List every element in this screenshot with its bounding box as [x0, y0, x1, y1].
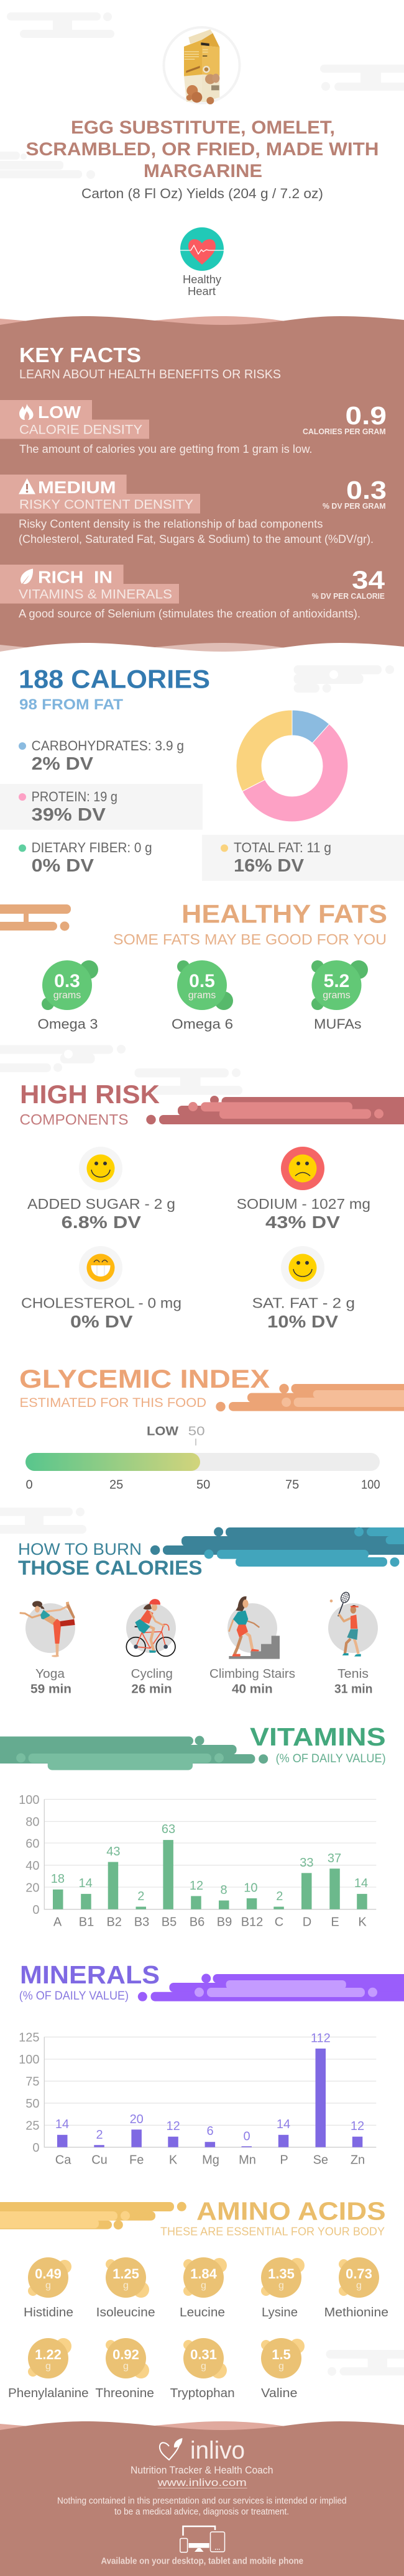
risk: cholesterol: 0% DV	[70, 1312, 133, 1331]
amino acid: leucine	[180, 2257, 227, 2319]
icon: healthy heart badge	[180, 227, 224, 298]
fat: omega 3: 0.3	[54, 971, 80, 991]
macro: carbohydrates	[19, 738, 184, 774]
heading: key facts: KEY FACTS	[19, 344, 141, 366]
fact: medium risky content density	[0, 475, 387, 545]
fat: omega 6: 0.5	[189, 971, 215, 991]
icon: healthy heart badge: Healthy	[183, 273, 221, 286]
amino acid: isoleucine	[96, 2257, 155, 2319]
fat: mufas: 5.2	[324, 971, 349, 991]
bar chart: vitamins: B2	[106, 1915, 122, 1929]
gauge: glycemic index: 25	[109, 1478, 123, 1492]
risk: sodium	[237, 1147, 370, 1232]
bar chart: vitamins: 18	[51, 1872, 65, 1886]
bar chart: minerals: Ca	[55, 2153, 71, 2167]
heading: glycemic index: ESTIMATED FOR THIS FOOD	[20, 1395, 206, 1410]
macro: total fat: TOTAL FAT: 11 g	[234, 840, 331, 855]
heading: healthy fats	[0, 899, 387, 949]
bar chart: vitamins: 10	[244, 1881, 258, 1895]
amino acid: threonine: g	[123, 2361, 129, 2372]
fact: low calorie density: CALORIES PER GRAM	[303, 427, 386, 436]
bar chart: minerals: 20	[130, 2113, 144, 2126]
bar chart: vitamins: 60	[25, 1837, 40, 1851]
bar chart: minerals: Mn	[239, 2153, 256, 2167]
exercise labels and durations: Yoga	[35, 1667, 65, 1681]
heading: amino acids: THESE ARE ESSENTIAL FOR YOUR BODY	[160, 2225, 385, 2238]
bar chart: minerals: 12	[351, 2119, 364, 2133]
bar chart: minerals: 0	[32, 2141, 40, 2155]
bar chart: minerals: 2	[96, 2128, 103, 2142]
title	[26, 117, 379, 181]
heading: key facts	[19, 344, 281, 381]
icon: desktop, tablet and phone	[180, 2526, 225, 2552]
bar chart: vitamins: 2	[137, 1890, 144, 1903]
bar chart: vitamins: K	[358, 1915, 367, 1929]
gauge: glycemic index: LOW	[147, 1425, 178, 1439]
fact: medium risky content density: (Cholesterol, Saturated Fat, Sugars & Sodium) to the amount (%DV/gr).	[19, 533, 374, 545]
macro: carbohydrates: CARBOHYDRATES: 3.9 g	[32, 738, 184, 753]
bar chart: vitamins: B12	[241, 1915, 263, 1929]
bar chart: vitamins: 2	[276, 1890, 283, 1903]
amino acid: histidine	[24, 2257, 73, 2319]
bar chart: vitamins: A	[53, 1915, 62, 1929]
amino acid: lysine: Lysine	[262, 2306, 298, 2319]
macro: dietary fiber: 0% DV	[32, 856, 94, 876]
fact: low calorie density	[0, 400, 387, 455]
exercise: yoga	[20, 1601, 75, 1657]
amino acid: tryptophan: 0.31	[190, 2347, 217, 2362]
gauge: glycemic index: 0	[26, 1478, 33, 1492]
heading: high risk components	[20, 1080, 404, 1129]
amino acid: threonine	[95, 2338, 154, 2400]
exercise: tennis	[328, 1591, 378, 1657]
amino acid: phenylalanine: g	[45, 2361, 51, 2372]
fact: medium risky content density: % DV PER GRAM	[323, 501, 386, 511]
amino acid: methionine: g	[356, 2280, 362, 2291]
bar chart: vitamins: C	[275, 1915, 283, 1929]
risk: added sugar	[27, 1147, 175, 1232]
exercise labels and durations: Cycling	[131, 1667, 173, 1681]
heading: vitamins	[0, 1723, 386, 1770]
heading: high risk components: HIGH RISK	[20, 1080, 160, 1109]
amino acid: valine: g	[278, 2361, 284, 2372]
amino acid: methionine: 0.73	[346, 2266, 372, 2282]
macro: dietary fiber: DIETARY FIBER: 0 g	[32, 840, 152, 855]
heading: minerals	[19, 1960, 404, 2003]
bar chart: vitamins: 12	[190, 1879, 203, 1893]
bar chart: minerals: 25	[25, 2119, 40, 2133]
fact: low calorie density: CALORIE DENSITY	[19, 422, 142, 437]
fat: omega 6: Omega 6	[172, 1016, 233, 1032]
macro: protein: 39% DV	[32, 805, 106, 825]
gauge: glycemic index: 50	[196, 1478, 210, 1492]
risk: saturated fat	[252, 1246, 355, 1331]
fat: omega 6	[172, 960, 233, 1032]
risk: cholesterol	[21, 1246, 181, 1331]
fat: mufas: grams	[323, 990, 351, 1001]
amino acid: phenylalanine	[8, 2338, 89, 2400]
icon: healthy heart badge: Heart	[188, 285, 216, 298]
amino acid: lysine	[261, 2257, 305, 2319]
footer text: www.inlivo.com	[157, 2477, 247, 2488]
fact: low calorie density: LOW	[38, 403, 81, 422]
amino acid: leucine: g	[201, 2280, 206, 2291]
heading: high risk components: COMPONENTS	[20, 1112, 128, 1129]
bar chart: minerals: 75	[25, 2075, 40, 2088]
amino acid: valine	[261, 2338, 305, 2400]
panel: footer	[0, 2421, 404, 2576]
bar chart: vitamins: 43	[106, 1845, 121, 1859]
amino acid: histidine: g	[45, 2280, 51, 2291]
exercise labels and durations: Tenis	[337, 1667, 369, 1681]
bar chart: minerals: 100	[19, 2053, 40, 2067]
fact: rich in vitamins and minerals	[0, 565, 385, 620]
gauge: glycemic index: 50	[188, 1425, 205, 1439]
fact: medium risky content density: RISKY CONTENT DENSITY	[19, 497, 193, 512]
bar chart: vitamins: B9	[217, 1915, 232, 1929]
bar chart: vitamins: 14	[78, 1877, 93, 1890]
exercise: climbing stairs	[227, 1596, 280, 1659]
footer text: Nothing contained in this presentation and our services is intended or implied	[57, 2496, 347, 2506]
heading: how to burn those calories	[18, 1527, 404, 1579]
amino acid: methionine	[324, 2257, 388, 2319]
bar chart: vitamins: B1	[79, 1915, 94, 1929]
heading: healthy fats: SOME FATS MAY BE GOOD FOR YOU	[113, 932, 387, 949]
heading: how to burn those calories: HOW TO BURN	[18, 1540, 142, 1559]
amino acid: histidine: Histidine	[24, 2306, 73, 2319]
bar chart: vitamins: B6	[190, 1915, 204, 1929]
bar chart: minerals: Cu	[91, 2153, 108, 2167]
gauge: glycemic index: 75	[285, 1478, 299, 1492]
amino acid: valine: Valine	[261, 2387, 297, 2400]
footer text: Nutrition Tracker & Health Coach	[131, 2464, 273, 2476]
gauge: glycemic index	[25, 1425, 380, 1492]
icon: egg substitute carton photo	[164, 27, 240, 104]
amino acid: tryptophan: Tryptophan	[170, 2387, 235, 2400]
bar chart: vitamins: D	[303, 1915, 311, 1929]
bar chart: minerals: 14	[55, 2118, 69, 2131]
amino acid: threonine: 0.92	[112, 2347, 139, 2362]
fact: rich in vitamins and minerals: VITAMINS & MINERALS	[19, 586, 172, 601]
heading: amino acids: AMINO ACIDS	[196, 2196, 386, 2225]
fat: omega 6: grams	[188, 990, 216, 1001]
risk: saturated fat: 10% DV	[267, 1312, 338, 1331]
risk: sodium: SODIUM - 1027 mg	[237, 1196, 370, 1212]
bar chart: minerals: P	[280, 2153, 288, 2167]
macro: dietary fiber	[19, 840, 152, 876]
bar chart: minerals: 125	[19, 2031, 40, 2045]
icon: inlivo logo: inlivo	[190, 2437, 245, 2464]
amino acid: lysine: 1.35	[268, 2266, 295, 2282]
amino acid: isoleucine: 1.25	[112, 2266, 139, 2282]
serving size subtitle: Carton (8 Fl Oz) Yields (204 g / 7.2 oz)	[81, 186, 323, 201]
gauge: glycemic index: 100	[361, 1478, 380, 1492]
fact: rich in vitamins and minerals: RICH IN	[38, 568, 112, 586]
heading: key facts: LEARN ABOUT HEALTH BENEFITS OR RISKS	[19, 368, 281, 381]
exercise labels and durations: 26 min	[131, 1682, 172, 1696]
macro: protein	[0, 784, 203, 830]
bar chart: vitamins: 8	[220, 1883, 227, 1897]
bar chart: minerals: Zn	[351, 2153, 365, 2167]
footer text: to be a medical advice, diagnosis or treatment.	[114, 2507, 289, 2517]
bar chart: vitamins: 40	[25, 1859, 40, 1873]
macro: protein: PROTEIN: 19 g	[32, 789, 117, 804]
bar chart: vitamins: 0	[32, 1903, 40, 1917]
footer text	[57, 2464, 347, 2517]
panel: key facts	[0, 316, 404, 658]
amino acid: valine: 1.5	[272, 2347, 291, 2362]
fat: mufas	[311, 960, 368, 1032]
amino acid: isoleucine: g	[123, 2280, 129, 2291]
bar chart: minerals: 112	[311, 2031, 331, 2045]
amino acid: isoleucine: Isoleucine	[96, 2306, 155, 2319]
bar chart: minerals: Fe	[129, 2153, 144, 2167]
heading: vitamins: (% OF DAILY VALUE)	[276, 1752, 386, 1765]
icon: inlivo logo	[160, 2437, 245, 2464]
fat: omega 3: grams	[53, 990, 81, 1001]
bar chart: minerals: Se	[313, 2153, 328, 2167]
amino acid: tryptophan: g	[201, 2361, 206, 2372]
risk: saturated fat: SAT. FAT - 2 g	[252, 1295, 355, 1311]
exercise labels and durations: 40 min	[232, 1682, 273, 1696]
fact: medium risky content density: 0.3	[346, 476, 387, 504]
title: MARGARINE	[144, 161, 262, 181]
bar chart: minerals: K	[169, 2153, 178, 2167]
risk: added sugar: 6.8% DV	[62, 1213, 141, 1232]
title: SCRAMBLED, OR FRIED, MADE WITH	[26, 139, 379, 160]
fat: omega 3: Omega 3	[37, 1016, 98, 1032]
heading: vitamins: VITAMINS	[250, 1723, 386, 1751]
amino acid: leucine: 1.84	[190, 2266, 218, 2282]
heading: glycemic index	[19, 1364, 404, 1411]
macro: total fat	[202, 835, 404, 881]
exercise labels and durations: 31 min	[334, 1682, 373, 1696]
bar chart: vitamins: 37	[328, 1852, 341, 1865]
macro: total fat: 16% DV	[234, 856, 305, 876]
amino acid: methionine: Methionine	[324, 2306, 388, 2319]
donut chart: calorie breakdown	[236, 710, 348, 822]
bar chart: vitamins: B3	[134, 1915, 149, 1929]
amino acid: histidine: 0.49	[35, 2266, 62, 2282]
amino acid: phenylalanine: 1.22	[35, 2347, 62, 2362]
fact: rich in vitamins and minerals: % DV PER CALORIE	[312, 591, 385, 601]
title: EGG SUBSTITUTE, OMELET,	[71, 117, 335, 138]
bar chart: minerals: 14	[277, 2118, 290, 2131]
heading: 188 calories: 98 FROM FAT	[19, 696, 123, 713]
fact: medium risky content density: Risky Content density is the relationship of bad components	[19, 518, 323, 530]
bar chart: vitamins: 80	[25, 1815, 40, 1829]
amino acid: phenylalanine: Phenylalanine	[8, 2387, 89, 2400]
fact: low calorie density: 0.9	[346, 401, 387, 430]
risk: sodium: 43% DV	[265, 1213, 340, 1232]
fact: low calorie density: The amount of calories you are getting from 1 gram is low.	[19, 443, 312, 455]
heading: healthy fats: HEALTHY FATS	[181, 899, 387, 928]
availability note: Available on your desktop, tablet and mobile phone	[101, 2556, 303, 2566]
fact: rich in vitamins and minerals: A good source of Selenium (stimulates the creation of antioxidants).	[19, 608, 360, 620]
amino acid: leucine: Leucine	[180, 2306, 225, 2319]
bar chart: vitamins: 100	[19, 1793, 40, 1807]
fact: rich in vitamins and minerals: 34	[352, 566, 385, 594]
bar chart: minerals: 6	[206, 2124, 214, 2138]
amino acid: lysine: g	[278, 2280, 284, 2291]
bar chart: vitamins: 20	[25, 1881, 40, 1895]
bar chart: minerals: 0	[243, 2129, 250, 2143]
bar chart: minerals: Mg	[202, 2153, 219, 2167]
heading: minerals: (% OF DAILY VALUE)	[19, 1990, 129, 2003]
bar chart: vitamins	[19, 1793, 376, 1929]
bar chart: vitamins: 63	[162, 1823, 175, 1836]
exercise: cycling	[126, 1599, 176, 1656]
exercise labels and durations: Climbing Stairs	[209, 1667, 295, 1681]
amino acid: tryptophan	[170, 2338, 235, 2400]
heading: glycemic index: GLYCEMIC INDEX	[19, 1364, 270, 1393]
bar chart: vitamins: 14	[354, 1877, 368, 1890]
bar chart: vitamins: 33	[300, 1856, 314, 1870]
bar chart: minerals: 12	[166, 2119, 180, 2133]
bar chart: minerals: 50	[25, 2097, 40, 2111]
bar chart: vitamins: E	[331, 1915, 339, 1929]
heading: minerals: MINERALS	[20, 1960, 160, 1989]
heading: how to burn those calories: THOSE CALORIES	[18, 1557, 203, 1579]
amino acid: threonine: Threonine	[95, 2387, 154, 2400]
fact: medium risky content density: MEDIUM	[38, 478, 116, 497]
fat: omega 3	[37, 960, 98, 1032]
heading: 188 calories	[19, 665, 210, 713]
bar chart: minerals	[19, 2031, 376, 2167]
risk: cholesterol: CHOLESTEROL - 0 mg	[21, 1295, 181, 1311]
risk: added sugar: ADDED SUGAR - 2 g	[27, 1196, 175, 1212]
exercise labels and durations	[30, 1667, 373, 1696]
heading: amino acids	[0, 2196, 386, 2238]
bar chart: vitamins: B5	[162, 1915, 177, 1929]
fat: mufas: MUFAs	[314, 1016, 362, 1032]
macro: carbohydrates: 2% DV	[32, 754, 94, 774]
heading: 188 calories: 188 CALORIES	[19, 665, 210, 693]
exercise labels and durations: 59 min	[30, 1682, 71, 1696]
